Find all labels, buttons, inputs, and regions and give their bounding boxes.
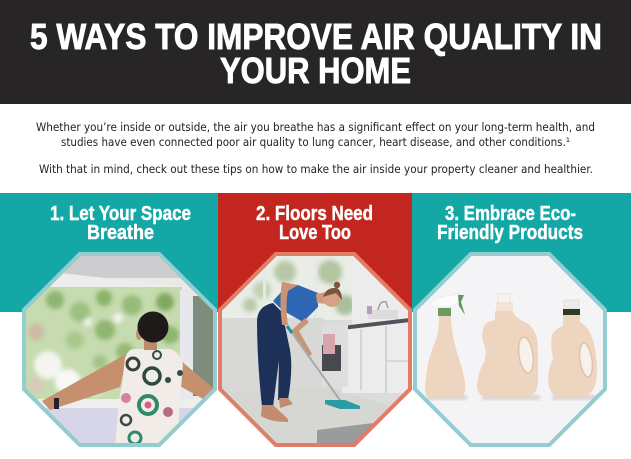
large bottle bbox=[477, 294, 538, 397]
heading 2: Love Too bbox=[279, 222, 351, 244]
heading 2: 2. Floors Need bbox=[256, 203, 373, 225]
intro text: studies have even connected poor air quality to lung cancer, heart disease, and other conditions.¹ bbox=[61, 135, 570, 149]
title: YOUR HOME bbox=[220, 50, 411, 91]
teal header band bbox=[0, 193, 218, 312]
octagon frame bbox=[24, 254, 215, 445]
heading 2 bbox=[256, 203, 373, 244]
title bbox=[30, 16, 602, 91]
woman bbox=[42, 312, 213, 447]
intro text: With that in mind, check out these tips on how to make the air inside your property cleaner and healthier. bbox=[39, 162, 593, 176]
heading 3: 3. Embrace Eco- bbox=[445, 203, 576, 225]
woman bbox=[257, 282, 360, 422]
heading 1: Breathe bbox=[87, 222, 154, 244]
panel: floors need love too bbox=[218, 193, 414, 448]
heading 1 bbox=[50, 203, 191, 244]
photo: woman mopping kitchen floor bbox=[218, 252, 414, 448]
panel: let your space breathe bbox=[0, 193, 218, 448]
panel: embrace eco-friendly products bbox=[412, 193, 631, 448]
heading 3: Friendly Products bbox=[437, 222, 583, 244]
teal header band bbox=[412, 193, 631, 312]
heading 3 bbox=[437, 203, 583, 244]
photo: three beige bottles bbox=[413, 252, 609, 448]
spray bottle bbox=[425, 294, 465, 397]
octagon frame bbox=[220, 254, 410, 445]
octagon frame bbox=[415, 254, 605, 445]
small bottle bbox=[548, 300, 597, 397]
photo: woman at open window bbox=[22, 252, 218, 448]
red header shape bbox=[218, 193, 412, 310]
title banner bbox=[0, 0, 631, 104]
heading 1: 1. Let Your Space bbox=[50, 203, 191, 225]
kitchen units bbox=[322, 302, 410, 393]
intro text bbox=[36, 120, 595, 176]
